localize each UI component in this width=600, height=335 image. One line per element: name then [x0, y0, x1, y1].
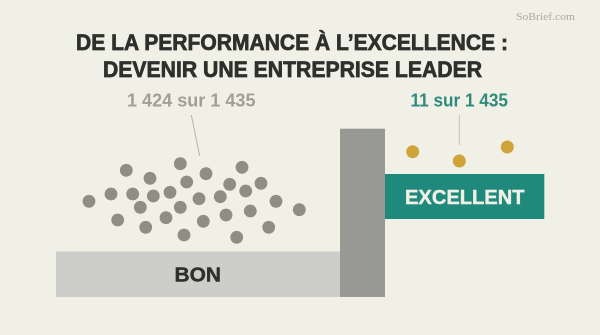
- pointer line: excellent companies: [458, 115, 460, 145]
- title: DE LA PERFORMANCE À L’EXCELLENCE :: [76, 30, 508, 55]
- gray dots: good companies: [83, 157, 306, 244]
- bar: EXCELLENT: EXCELLENT: [405, 187, 524, 209]
- wall column: [340, 129, 385, 297]
- title: [76, 30, 508, 82]
- bar: EXCELLENT: [385, 174, 544, 219]
- label: 1 424 sur 1 435: 1 424 sur 1 435: [127, 91, 256, 111]
- title: DEVENIR UNE ENTREPRISE LEADER: [103, 57, 482, 82]
- gold dots: excellent companies: [406, 140, 514, 168]
- bar: BON: [56, 252, 340, 297]
- label: 11 sur 1 435: 11 sur 1 435: [410, 91, 508, 111]
- bar: BON: BON: [174, 265, 221, 287]
- watermark: SoBrief.com: [516, 12, 575, 23]
- pointer line: good companies: [191, 115, 200, 156]
